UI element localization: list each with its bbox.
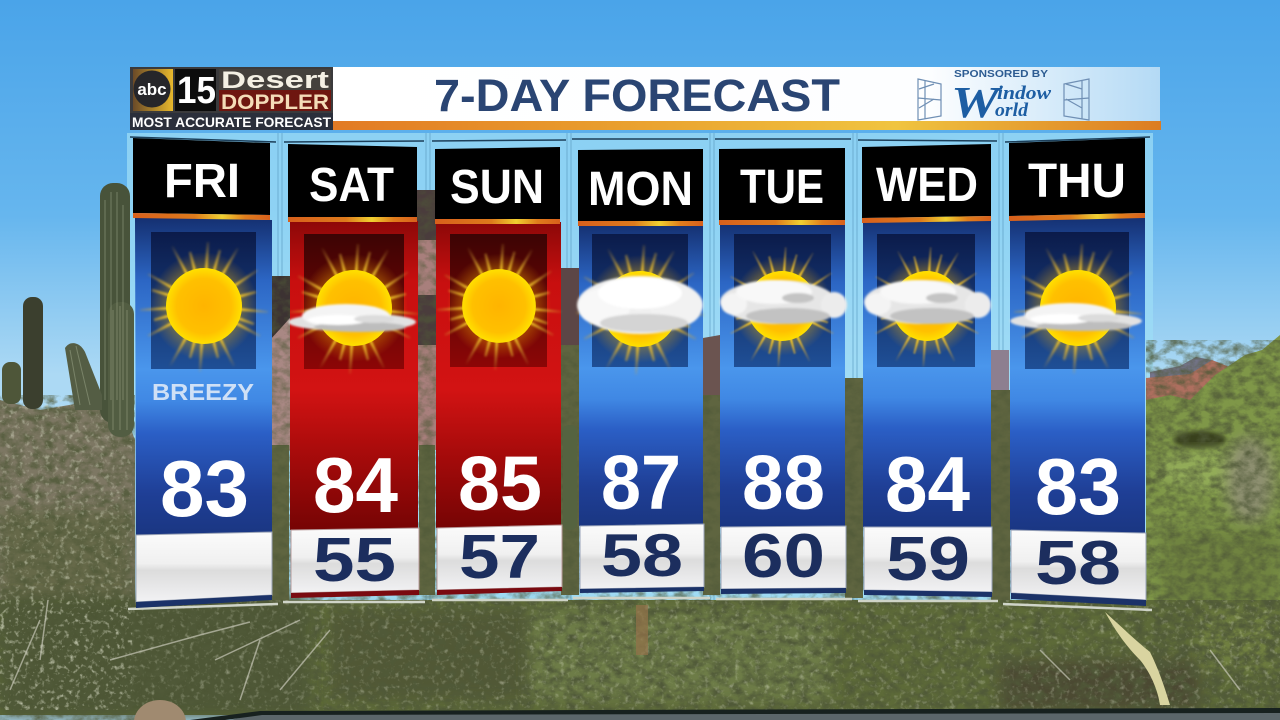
THU header: THU <box>1028 155 1126 208</box>
MON header: MON <box>588 163 693 216</box>
low panel <box>437 523 562 592</box>
high temperature: 85 <box>458 441 542 527</box>
column: SAT <box>288 144 419 598</box>
Desert <box>219 67 331 94</box>
TUE header <box>719 148 845 220</box>
THU header <box>1009 138 1145 216</box>
logo: abc15 Desert Doppler <box>130 67 333 130</box>
high temperature: 83 <box>160 444 249 533</box>
low panel: 58 <box>1035 529 1121 598</box>
vegetation: left slope <box>0 400 135 620</box>
sponsor: Window World: W <box>951 78 1003 127</box>
vegetation: lower band <box>0 596 1280 716</box>
SAT header: SAT <box>309 159 394 212</box>
low panel: 55 <box>313 526 396 595</box>
pale tree trunk <box>1105 612 1170 705</box>
barrel cactus <box>134 700 186 720</box>
low panel <box>1011 529 1146 600</box>
icon: sun behind cloud <box>864 247 991 367</box>
saguaro cacti <box>2 183 648 655</box>
high temperature: 84 <box>313 441 398 529</box>
WED header <box>862 144 991 218</box>
vegetation: right trees <box>1146 335 1280 620</box>
bare white branches <box>10 600 1240 700</box>
low panel empty <box>136 532 272 602</box>
column: MON <box>576 149 704 593</box>
SUN header: SUN <box>450 161 544 214</box>
vegetation between columns <box>272 345 1010 605</box>
FRI header: FRI <box>164 155 240 208</box>
sponsor: Window World <box>918 68 1089 127</box>
low panel: 59 <box>886 525 970 594</box>
low panel <box>291 526 419 595</box>
low panel <box>580 522 704 589</box>
icon: sun <box>437 244 561 370</box>
DOPPLER: DOPPLER <box>221 91 329 114</box>
icon: sun behind cloud <box>288 244 418 374</box>
Desert: Desert <box>221 67 329 94</box>
low panel <box>721 522 846 591</box>
icon: sun <box>140 242 268 372</box>
column glass base lines <box>128 598 1152 610</box>
abc badge <box>134 70 170 108</box>
SUN header <box>435 147 560 219</box>
low panel: 58 <box>601 522 683 589</box>
foreground dark bar <box>190 708 1280 720</box>
icon: window left <box>918 79 941 120</box>
column: SUN <box>435 147 562 595</box>
icon: sun behind cloud <box>576 245 704 375</box>
low panel: 60 <box>742 522 825 591</box>
title: 7-DAY FORECAST <box>434 70 840 121</box>
low panel: 57 <box>459 523 540 592</box>
column: THU <box>1009 138 1146 606</box>
distant red mountain at right <box>1146 357 1232 404</box>
BREEZY label: BREEZY <box>152 379 254 405</box>
channel number: 15 <box>177 70 216 112</box>
high temperature: 87 <box>601 440 681 526</box>
icon: sun behind cloud <box>720 247 847 367</box>
tagline: MOST ACCURATE FORECAST <box>132 114 331 130</box>
low panel <box>864 525 992 594</box>
SAT header <box>288 144 417 217</box>
sponsor: Window World: orld <box>995 100 1029 121</box>
column: TUE <box>719 148 847 594</box>
column: FRI <box>133 138 272 608</box>
sponsor: Window World: indow <box>997 83 1051 104</box>
red rock butte <box>270 190 1009 470</box>
glass frame behind forecast columns <box>127 133 1153 613</box>
vegetation texture <box>0 190 1280 720</box>
TUE header: TUE <box>740 161 824 214</box>
high temperature: 84 <box>885 440 970 528</box>
abc badge: abc <box>137 80 167 99</box>
icon: sun behind cloud <box>1010 244 1142 374</box>
high temperature: 83 <box>1035 442 1121 531</box>
column: WED <box>862 144 992 597</box>
title banner <box>333 67 1161 130</box>
FRI header <box>133 138 270 215</box>
icon: window right <box>1064 79 1089 120</box>
WED header: WED <box>876 159 978 212</box>
MON header <box>578 149 703 221</box>
high temperature: 88 <box>742 440 825 526</box>
sponsor: Window World: SPONSORED BY <box>954 68 1048 80</box>
